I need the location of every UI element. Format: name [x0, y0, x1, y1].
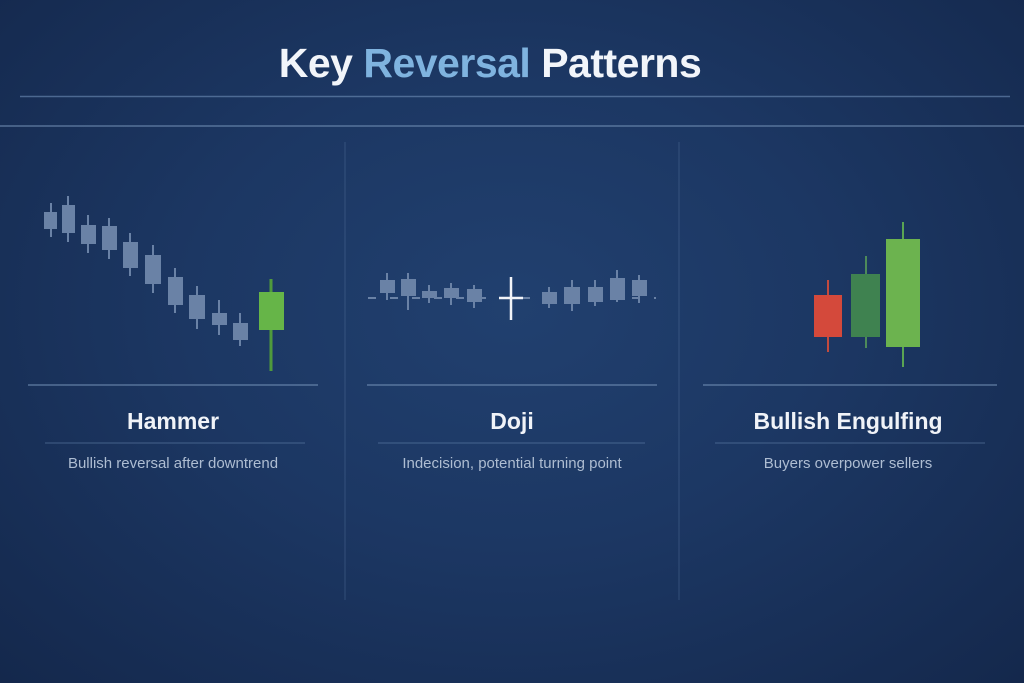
title: Key Reversal Patterns — [279, 40, 701, 86]
chart: doji — [368, 270, 656, 320]
label: Bullish Engulfing: Bullish Engulfing — [753, 408, 943, 434]
label: Doji: Doji — [490, 408, 534, 434]
chart: bullish engulfing — [814, 222, 920, 367]
desc: Doji: Indecision, potential turning point — [402, 455, 622, 472]
desc: Bullish Engulfing: Buyers overpower sellers — [764, 455, 932, 472]
chart: hammer — [44, 196, 284, 371]
label: Hammer: Hammer — [127, 408, 219, 434]
desc: Hammer: Bullish reversal after downtrend — [68, 455, 278, 472]
